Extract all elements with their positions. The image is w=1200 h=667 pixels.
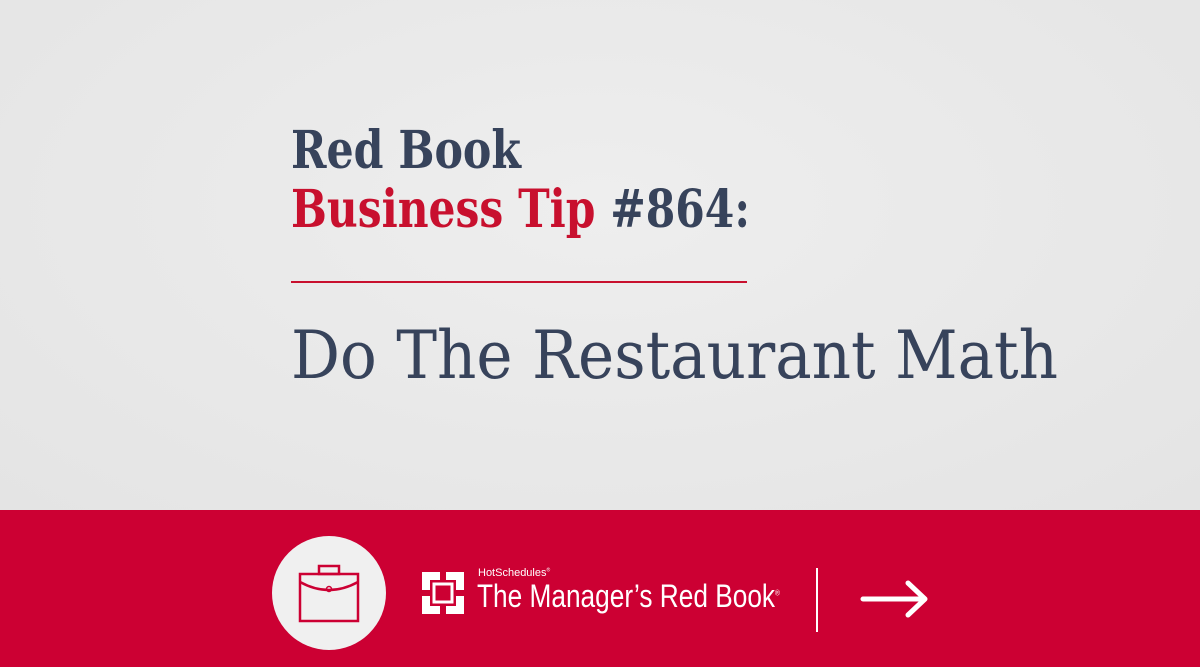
icon: logo mark xyxy=(422,572,464,614)
arrow xyxy=(860,580,928,618)
logo: The Manager’s Red Book® xyxy=(477,578,780,614)
background paper xyxy=(0,0,1200,510)
icon: briefcase in circle xyxy=(272,536,386,650)
subtitle: Do The Restaurant Math xyxy=(291,317,1058,394)
heading: Business Tip #864: Business Tip #864: xyxy=(291,179,750,240)
title block xyxy=(291,120,1058,394)
heading: Red Book: Red Book xyxy=(291,120,522,181)
logo xyxy=(422,567,780,614)
logo: HotSchedules® xyxy=(478,567,550,579)
footer bar xyxy=(0,510,1200,667)
